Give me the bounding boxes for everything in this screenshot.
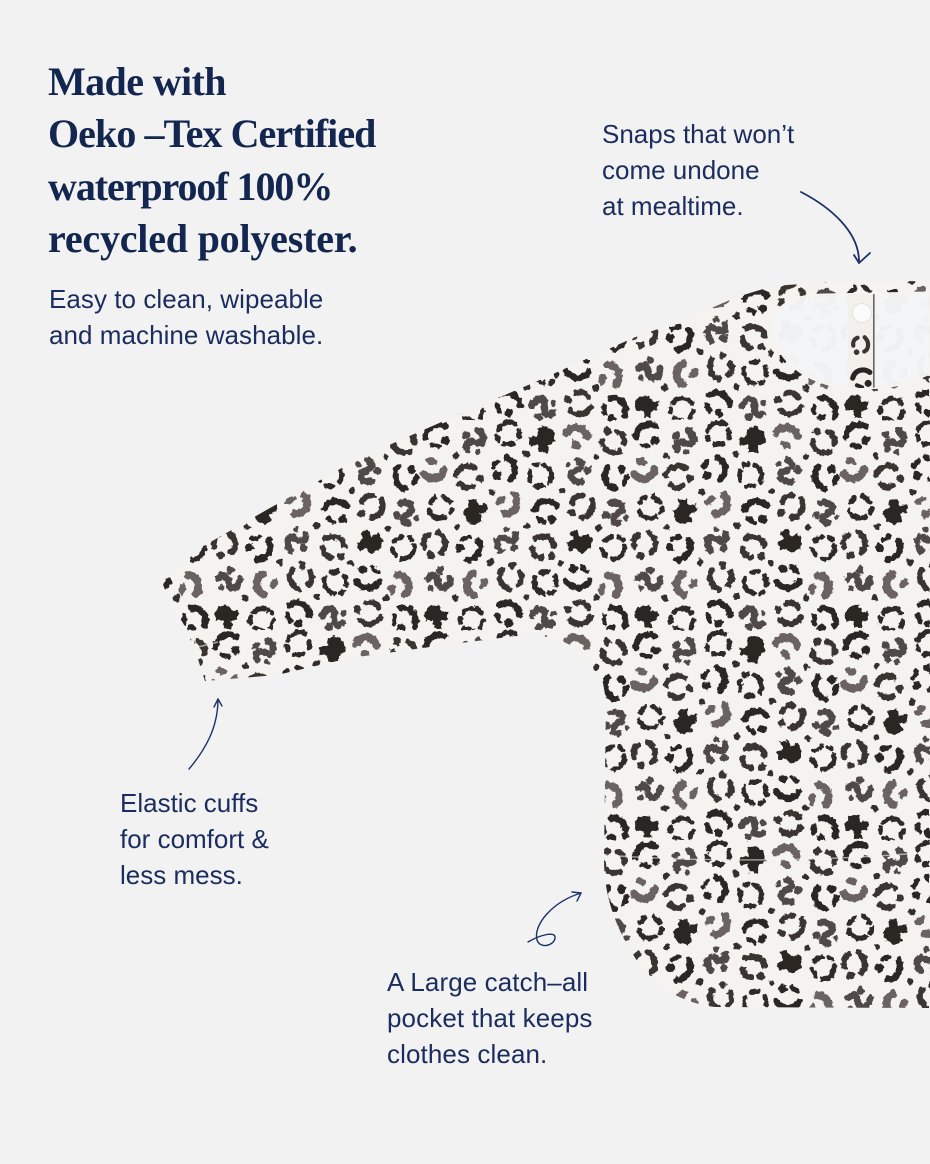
callout: elastic cuffs: for comfort & xyxy=(120,824,269,854)
arrow: elastic cuffs xyxy=(189,699,222,769)
placket xyxy=(848,294,875,388)
callout: pocket xyxy=(387,967,592,1069)
callout: snaps: at mealtime. xyxy=(602,191,744,221)
subtitle text: and machine washable. xyxy=(49,320,323,350)
callout: snaps: come undone xyxy=(602,155,760,185)
callout: pocket: A Large catch–all xyxy=(387,967,588,997)
callout: pocket: clothes clean. xyxy=(387,1039,547,1069)
elastic cuff gathers xyxy=(182,632,218,650)
subtitle text: Easy to clean, wipeable xyxy=(49,284,323,314)
subtitle text xyxy=(49,284,323,350)
callout: elastic cuffs xyxy=(120,788,269,890)
callout: snaps: Snaps that won’t xyxy=(602,119,794,149)
title: Made with xyxy=(48,59,226,104)
title: Oeko –Tex Certified xyxy=(48,111,375,156)
callout: pocket: pocket that keeps xyxy=(387,1003,592,1033)
arrow: snaps xyxy=(801,192,870,263)
pocket seam xyxy=(604,852,930,860)
bib body with leopard print xyxy=(150,270,930,1020)
callout: snaps xyxy=(602,119,794,221)
title: waterproof 100% xyxy=(48,164,332,209)
arrow: pocket xyxy=(528,892,581,946)
snap button xyxy=(852,304,872,322)
callout: elastic cuffs: less mess. xyxy=(120,860,243,890)
title xyxy=(48,59,376,261)
neck opening with snap placket xyxy=(772,290,930,391)
callout: elastic cuffs: Elastic cuffs xyxy=(120,788,258,818)
title: recycled polyester. xyxy=(48,216,357,261)
